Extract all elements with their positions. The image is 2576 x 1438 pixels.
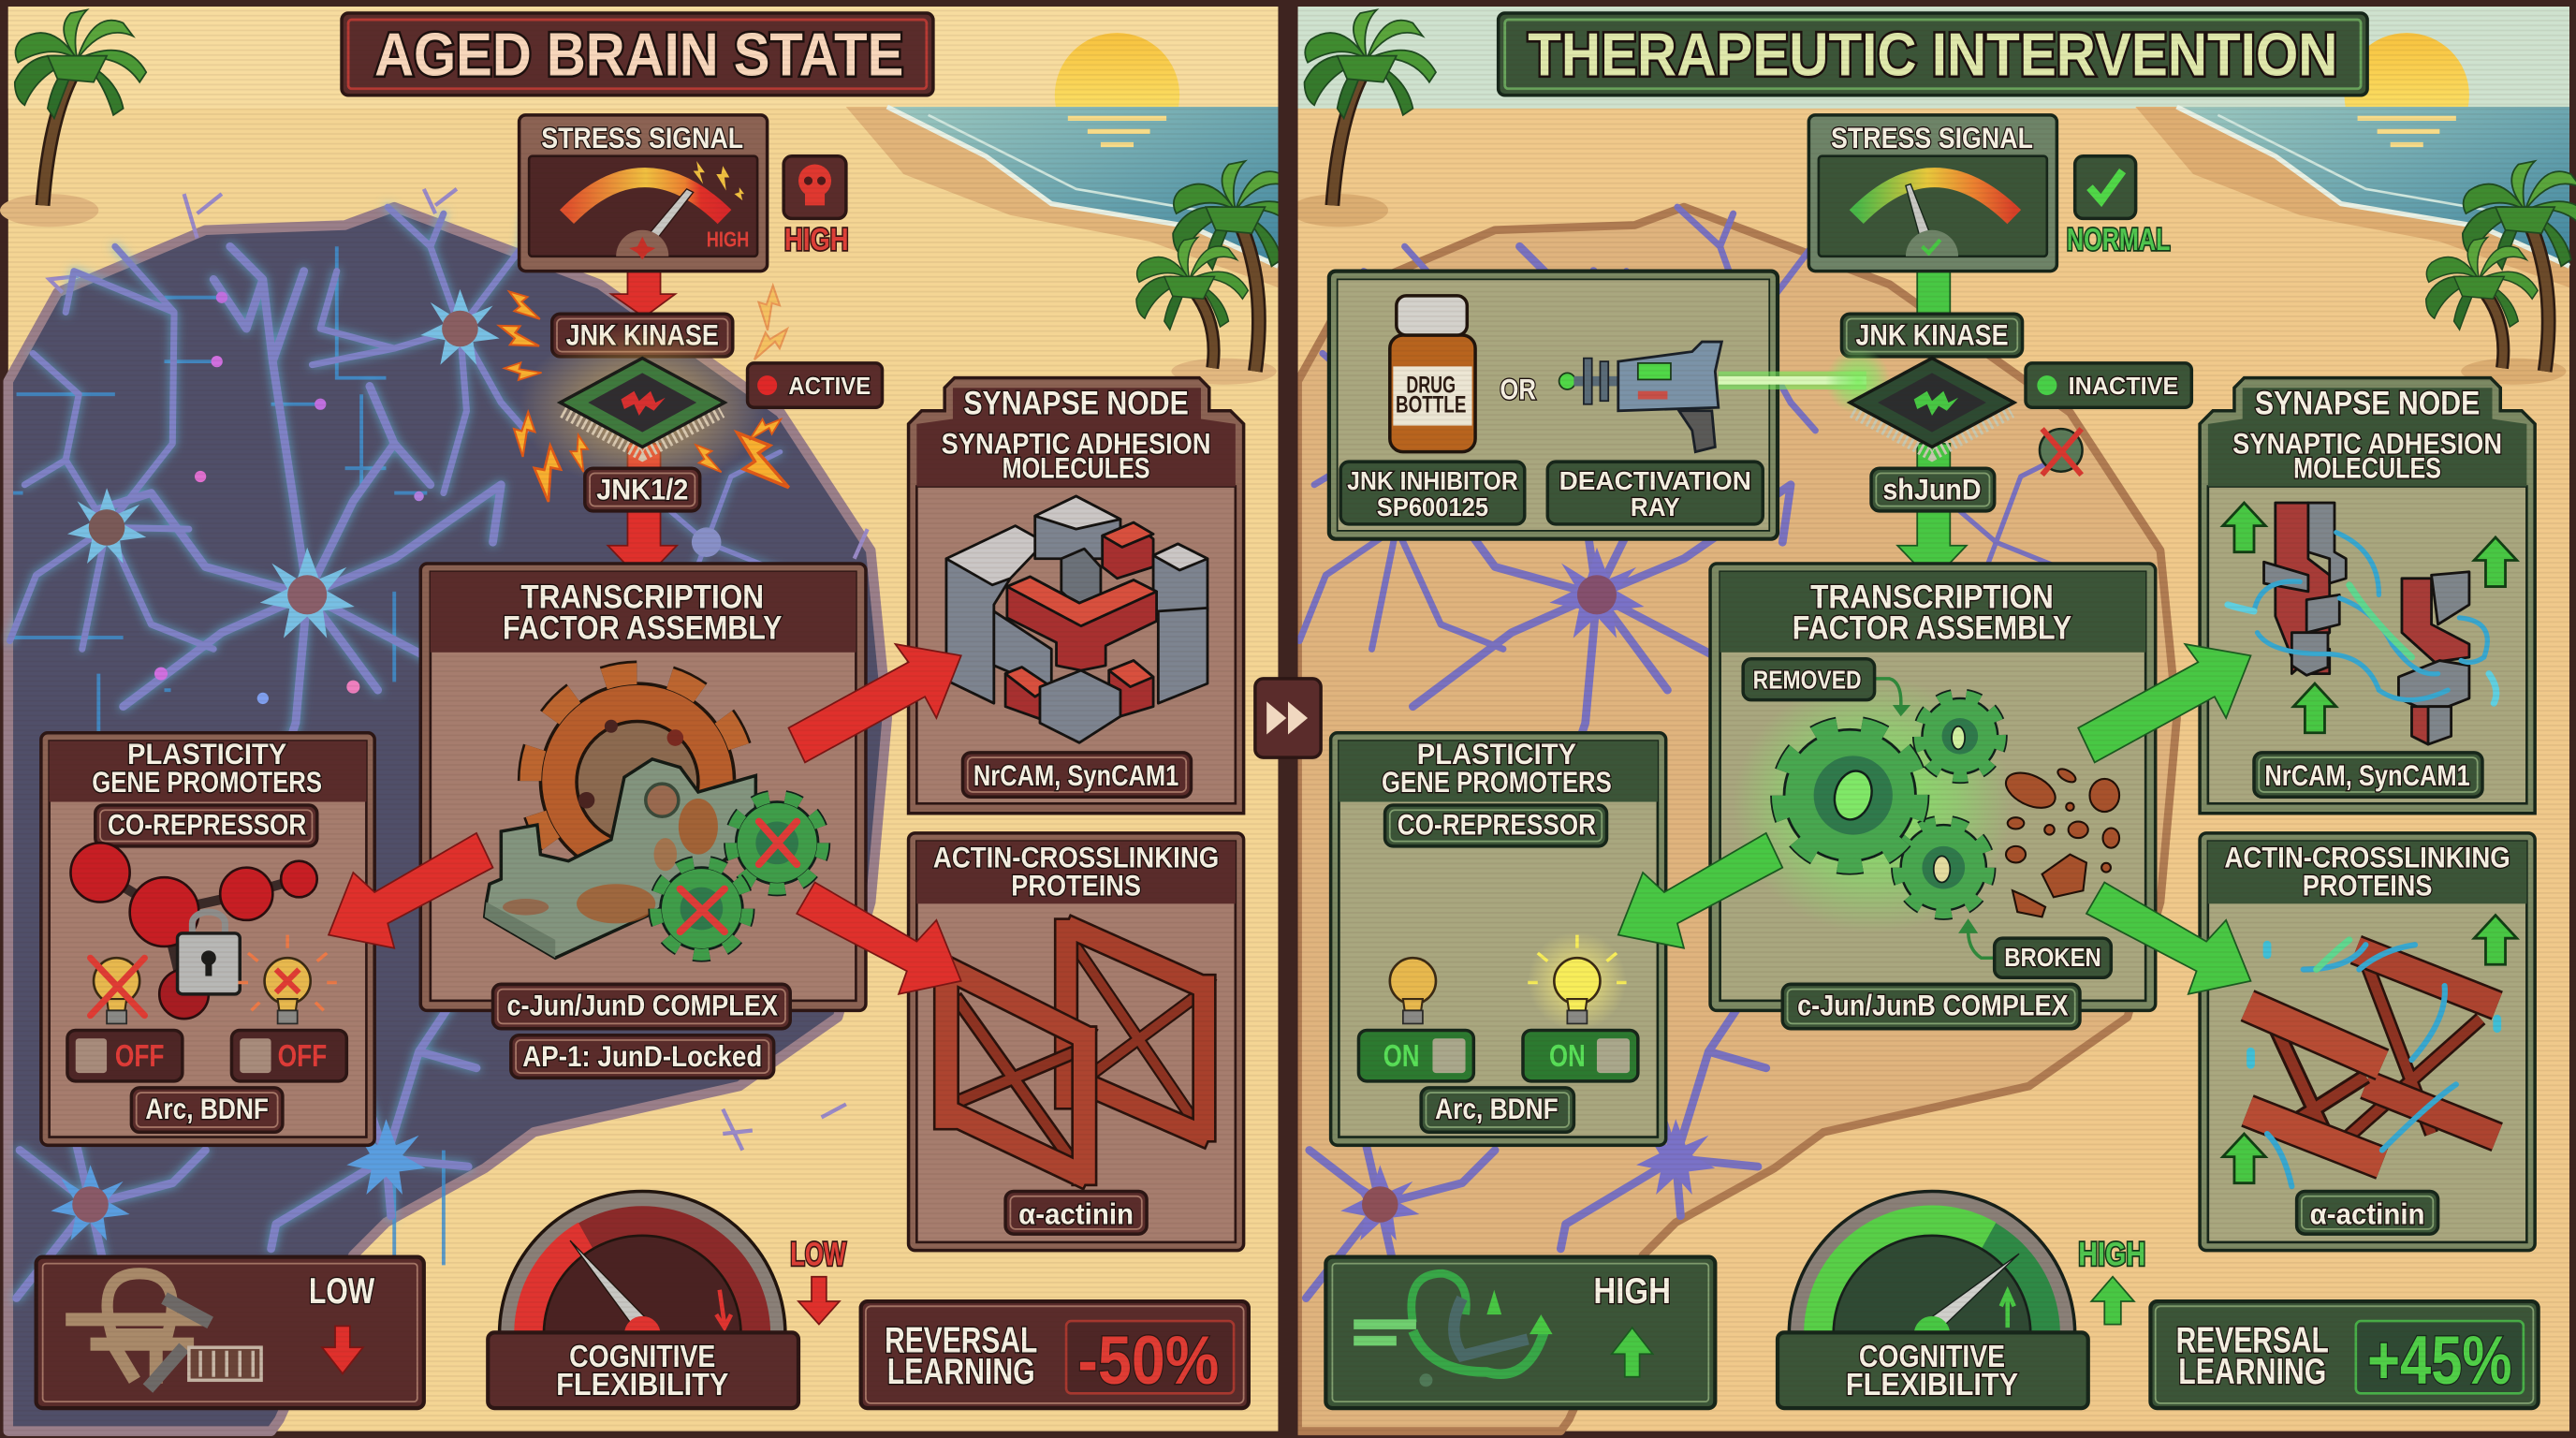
panel: synapse node: SYNAPSE NODE (963, 385, 1189, 421)
divider: centre bar (1278, 0, 1298, 1438)
panel: reversal learning: +45% (2367, 1321, 2512, 1399)
label: co-repressor: CO-REPRESSOR (108, 808, 306, 842)
label: removed with arrow: REMOVED (1753, 665, 1862, 694)
label: jnk inhibitor (1340, 462, 1525, 524)
status: inactive tag (2026, 363, 2191, 407)
icon: co-repressor molecule with lock (70, 843, 317, 1019)
panel: transcription factor assembly (420, 564, 866, 1010)
label: broken with arrow: BROKEN (2004, 943, 2101, 972)
status: inactive tag: INACTIVE (2069, 372, 2178, 400)
label: shjund: shJunD (1882, 473, 1982, 506)
scene: right beach background (1298, 7, 2569, 1431)
arrow: assembly to plasticity (329, 833, 493, 948)
panel: synapse node: SYNAPTIC ADHESION (2232, 426, 2502, 460)
arrow: kinase to assembly (607, 444, 677, 581)
switch: off two: OFF (278, 1039, 327, 1074)
panel: low structure readout (37, 1257, 424, 1408)
status: active tag: ACTIVE (788, 372, 871, 400)
arrow: assembly to synapse (788, 644, 961, 762)
icon: rust debris (2000, 766, 2119, 917)
icon: blocked signal (2040, 429, 2083, 475)
label: alpha-actinin: α-actinin (2310, 1197, 2425, 1231)
arrow: kinase to assembly (1897, 444, 1967, 581)
icon: dim bulb (1390, 958, 1436, 1023)
panel: stress signal (1808, 115, 2056, 271)
text: high: HIGH (2078, 1236, 2145, 1272)
panel: transcription factor assembly (1710, 564, 2156, 1010)
label: ap-1 jund-locked: AP-1: JunD-Locked (522, 1039, 762, 1073)
icon: locked cube of adhesion molecules (946, 496, 1208, 742)
icon: drug bottle: DRUG (1406, 373, 1456, 398)
panel: plasticity gene promoters: PLASTICITY (127, 737, 286, 770)
label: alpha-actinin (1005, 1191, 1147, 1234)
icon: up arrows (2223, 916, 2517, 1183)
label: jnk kinase (552, 314, 733, 357)
chart: stress gauge high (567, 161, 749, 259)
panel: synapse node: MOLECULES (1003, 451, 1150, 485)
title: THERAPEUTIC INTERVENTION (1528, 21, 2338, 89)
label: nrcam syncam1 (962, 753, 1191, 797)
chart: cognitive flexibility gauge low (488, 1192, 798, 1408)
label: arc bdnf: Arc, BDNF (145, 1092, 269, 1125)
label: c-jun/junb complex (1782, 984, 2080, 1029)
panel: reversal learning (2150, 1301, 2539, 1408)
label: deactivation ray: RAY (1631, 492, 1680, 521)
label: deactivation ray (1547, 462, 1763, 524)
panel: plasticity gene promoters: PLASTICITY (1417, 737, 1576, 770)
text: low: LOW (790, 1236, 847, 1272)
icon: broken green gears (655, 797, 823, 955)
switch: off one: OFF (115, 1039, 165, 1074)
title: AGED BRAIN STATE (374, 21, 903, 89)
label: alpha-actinin: α-actinin (1018, 1197, 1134, 1231)
label: jnk inhibitor: JNK INHIBITOR (1347, 466, 1518, 495)
panel: reversal learning: LEARNING (2178, 1352, 2326, 1392)
arrow: assembly to actin (2086, 882, 2250, 994)
chart: cognitive flexibility gauge high: COGNITIVE (1859, 1340, 2005, 1374)
chart: stress gauge normal (1856, 178, 2014, 257)
label: arc bdnf (1421, 1088, 1573, 1132)
panel: reversal learning (861, 1301, 1249, 1408)
label: nrcam syncam1: NrCAM, SynCAM1 (973, 758, 1178, 792)
panel: high structure readout: HIGH (1593, 1271, 1671, 1312)
switch: on two (1523, 1030, 1638, 1081)
panel: reversal learning: REVERSAL (885, 1320, 1037, 1360)
panel: actin-crosslinking proteins: PROTEINS (1011, 869, 1141, 902)
icon: repaired machine (1354, 1273, 1553, 1387)
label: jnk kinase (1841, 314, 2023, 357)
icon: degraded machine (66, 1273, 261, 1388)
panel: actin-crosslinking proteins (2200, 833, 2535, 1251)
status: active tag (748, 363, 882, 407)
panel: plasticity gene promoters (1331, 733, 1666, 1145)
label: shjund (1871, 468, 1995, 511)
panel: actin-crosslinking proteins: ACTIN-CROSSLINKING (2224, 841, 2510, 874)
arrow: assembly to plasticity (1618, 833, 1782, 948)
label: c-jun/jund complex (493, 984, 790, 1029)
switch: on one (1358, 1030, 1473, 1081)
illustration: recovering brain with neurons (1298, 207, 2177, 1431)
panel: intervention options (1329, 271, 1778, 539)
label: removed with arrow (1743, 659, 1910, 716)
label: arc bdnf (131, 1088, 283, 1132)
label: jnk1/2 (585, 468, 700, 511)
label: arc bdnf: Arc, BDNF (1435, 1092, 1559, 1125)
panel: stress signal: STRESS SIGNAL (1831, 121, 2033, 154)
scene: left beach background (8, 7, 1278, 1431)
arrow: assembly to synapse (2078, 644, 2250, 762)
panel: transcription factor assembly: TRANSCRIPTION (1810, 579, 2054, 615)
panel: transcription factor assembly: TRANSCRIPTION (520, 579, 764, 615)
text: high status: HIGH (784, 223, 849, 257)
icon: right palm trees (2426, 161, 2576, 385)
icon: skull warning (783, 156, 846, 218)
icon: energy swirls (2228, 533, 2496, 703)
icon: left palm tree (1290, 10, 1436, 227)
panel: plasticity gene promoters: GENE PROMOTERS (1382, 765, 1612, 799)
chart: cognitive flexibility gauge low: COGNITIVE (569, 1340, 715, 1374)
panel: transcription factor assembly: FACTOR ASSEMBLY (503, 610, 782, 647)
panel: actin-crosslinking proteins: ACTIN-CROSSLINKING (933, 841, 1219, 874)
icon: rusty gear machine (485, 674, 755, 958)
icon: flexible actin truss (2247, 949, 2497, 1164)
switch: off two (231, 1030, 346, 1081)
icon: restored green gears (1734, 677, 2012, 933)
arrow: stress to JNK (611, 271, 675, 317)
illustration: aged dark brain with neurons (8, 189, 887, 1431)
text: normal status: NORMAL (2067, 223, 2170, 257)
label: c-jun/junb complex: c-Jun/JunB COMPLEX (1797, 989, 2069, 1022)
panel: synapse node: SYNAPSE NODE (2255, 385, 2480, 421)
icon: inactive kinase chip with beam (1719, 348, 2014, 453)
panel: plasticity gene promoters: GENE PROMOTERS (92, 765, 322, 799)
panel: low structure readout: LOW (309, 1271, 375, 1312)
panel: actin-crosslinking proteins: PROTEINS (2303, 869, 2432, 902)
chart: cognitive flexibility gauge high (1778, 1191, 2088, 1408)
icon: glowing bulb (1528, 932, 1627, 1030)
icon: low down arrow (798, 1277, 840, 1325)
label: co-repressor (1385, 805, 1606, 846)
switch: on two: ON (1549, 1039, 1586, 1074)
panel: stress signal (520, 115, 768, 271)
chart: cognitive flexibility gauge high: FLEXIBILITY (1846, 1368, 2018, 1402)
icon: centre fast-forward button (1255, 679, 1321, 757)
label: co-repressor (95, 805, 317, 846)
chart: stress gauge high: HIGH (707, 227, 749, 251)
icon: check badge (2075, 156, 2136, 218)
label: jnk inhibitor: SP600125 (1377, 492, 1488, 521)
switch: off one (67, 1030, 183, 1081)
label: c-jun/jund complex: c-Jun/JunD COMPLEX (506, 989, 778, 1022)
icon: released adhesion molecules (2264, 503, 2469, 744)
panel: synapse node: MOLECULES (2293, 451, 2441, 485)
icon: right palm trees (1136, 161, 1305, 385)
label: jnk1/2: JNK1/2 (596, 473, 688, 506)
label: deactivation ray: DEACTIVATION (1559, 466, 1751, 495)
label: alpha-actinin (2297, 1191, 2438, 1234)
label: jnk kinase: JNK KINASE (566, 318, 719, 352)
icon: rigid actin truss (946, 930, 1204, 1173)
text: or: OR (1500, 372, 1536, 405)
label: broken with arrow (1958, 918, 2111, 977)
icon: deactivation ray gun (1559, 342, 1721, 452)
label: co-repressor: CO-REPRESSOR (1398, 808, 1596, 842)
icon: high up arrow (2091, 1277, 2134, 1325)
panel: synapse node: SYNAPTIC ADHESION (942, 426, 1211, 460)
chart: cognitive flexibility gauge low: FLEXIBILITY (556, 1368, 728, 1402)
icon: down arrow (322, 1326, 363, 1373)
panel: synapse node (909, 378, 1244, 814)
panel: actin-crosslinking proteins (909, 833, 1244, 1251)
panel: therapeutic intervention (1290, 7, 2576, 1431)
icon: crossed bulb one (91, 958, 144, 1023)
icon: drug bottle: BOTTLE (1396, 393, 1466, 418)
label: nrcam syncam1 (2254, 753, 2482, 797)
arrow: assembly to actin (797, 882, 961, 994)
panel: aged brain state (0, 7, 1305, 1431)
switch: on one: ON (1383, 1039, 1419, 1074)
panel: reversal learning: LEARNING (887, 1352, 1035, 1392)
icon: crossed bulb two (238, 935, 337, 1023)
panel: stress signal: STRESS SIGNAL (541, 121, 743, 154)
icon: active kinase chip with sparks (496, 284, 793, 502)
panel: high structure readout (1325, 1257, 1715, 1408)
icon: up arrows (2223, 503, 2517, 733)
label: jnk kinase: JNK KINASE (1855, 318, 2009, 352)
label: nrcam syncam1: NrCAM, SynCAM1 (2264, 758, 2470, 792)
icon: up arrow (1612, 1328, 1653, 1377)
panel: synapse node (2200, 378, 2535, 814)
panel: reversal learning: REVERSAL (2176, 1320, 2329, 1360)
panel: transcription factor assembly: FACTOR ASSEMBLY (1793, 610, 2071, 647)
panel: reversal learning: -50% (1077, 1321, 1219, 1399)
icon: blue energy wisps (2250, 940, 2497, 1186)
panel: plasticity gene promoters (41, 733, 374, 1145)
icon: left palm tree (0, 10, 146, 227)
arrow: stress to JNK (1917, 271, 1950, 315)
icon: drug bottle (1390, 296, 1475, 452)
